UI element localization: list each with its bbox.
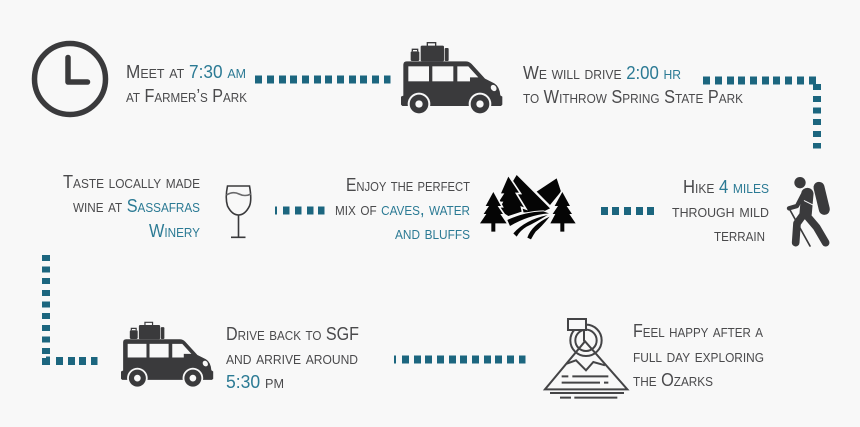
text: meet at park: Meet at 7:30 am [126,62,246,82]
text: hike 4 miles: terrain [714,225,765,245]
dotted connector: clock to van [255,76,390,84]
text: feel happy: full day exploring [633,346,764,366]
text: drive back to SGF [226,324,359,392]
text: drive back to SGF: and arrive around [226,348,358,368]
icon: mountain with flag and sun [545,319,627,398]
icon: wine glass [226,186,251,237]
text: caves, water and bluffs: Enjoy the perfect [346,175,470,195]
text: meet at park: at Farmer’s Park [126,86,247,106]
text: caves, water and bluffs: mix of caves, water [335,199,470,219]
text: hike 4 miles: through mild [672,201,769,221]
text: drive back to SGF: 5:30 pm [226,372,284,392]
text: hike 4 miles: Hike 4 miles [683,177,769,197]
text: hike 4 miles [672,177,769,245]
text: drive back to SGF: Drive back to SGF [226,324,359,344]
text: drive to state park [523,63,743,107]
icon: forest and mountains [480,175,576,239]
dotted connector: return van to mountain [394,356,526,364]
icon: clock [34,44,106,114]
text: taste wine [63,172,200,241]
dotted connector: van to hiker [703,76,821,148]
text: caves, water and bluffs: and bluffs [395,223,470,243]
icon: van with luggage (bottom) [121,322,213,388]
text: caves, water and bluffs [335,175,470,243]
text: taste wine: wine at Sassafras [73,196,200,216]
text: taste wine: Winery [149,221,200,241]
text: taste wine: Taste locally made [63,172,200,192]
text: feel happy: the Ozarks [633,370,713,390]
icon: hiker [789,177,826,246]
text: drive to state park: to Withrow Spring State Park [523,87,743,107]
text: meet at park [126,62,247,106]
text: drive to state park: We will drive 2:00 hr [523,63,681,83]
icon: van with luggage (top) [401,43,502,115]
text: feel happy: Feel happy after a [633,321,763,341]
dotted connector: wine to return van [42,255,98,365]
dotted connector: wine to forest [275,206,324,214]
text: feel happy [633,321,764,390]
dotted connector: forest to hiker text [601,207,654,215]
